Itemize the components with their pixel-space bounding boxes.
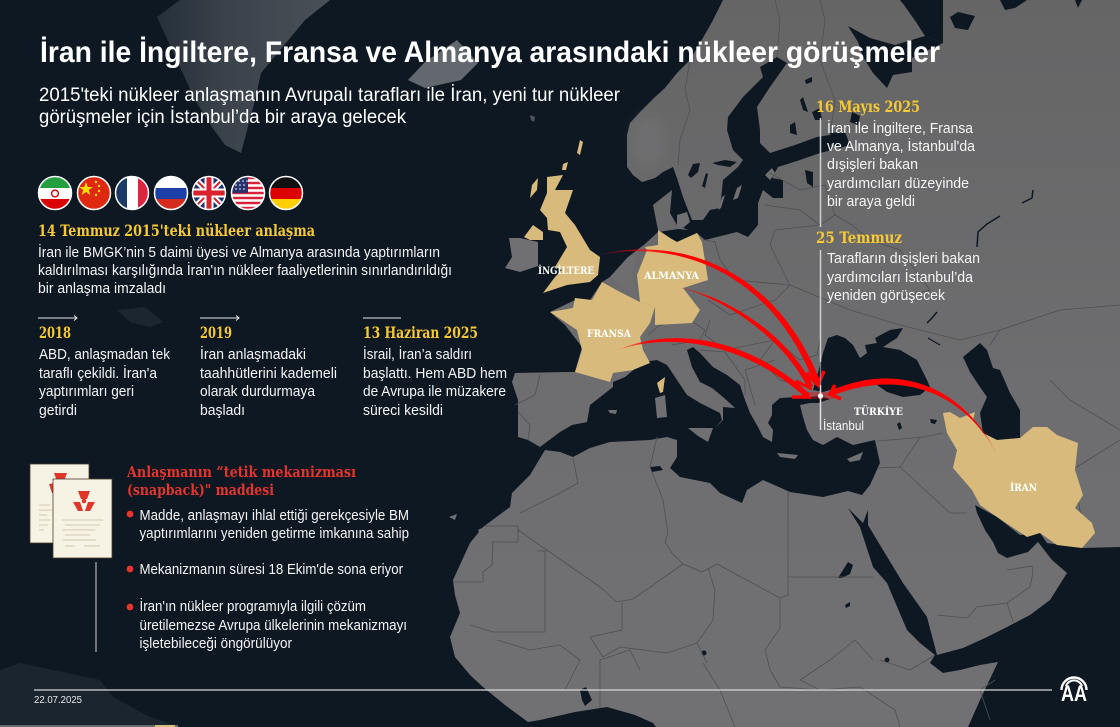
map: highlighted Germany	[637, 230, 708, 325]
icon: flag of United States	[232, 177, 264, 209]
map: Mediterranean and Baltic islands	[449, 168, 863, 534]
vertical line: to Istanbul	[820, 362, 822, 385]
icon: flag of Iran	[39, 177, 71, 209]
title: İran ile İngiltere, Fransa ve Almanya arasındaki nükleer görüşmeler	[40, 36, 940, 69]
text: 25 Temmuz body: Tarafların dışişleri bakan	[827, 251, 980, 267]
arrow: 2018	[38, 316, 77, 320]
map: Caspian Sea	[963, 343, 1020, 440]
text: 2018 body: yaptırımları geri	[39, 384, 134, 400]
map: highlighted France	[550, 282, 655, 382]
icon: flag of France	[116, 177, 148, 209]
footer	[34, 677, 1087, 706]
text: deal description: kaldırılması karşılığında İran'ın nükleer faaliyetlerinin sınırlandırıldığı	[38, 261, 452, 279]
heading: snapback	[126, 463, 356, 499]
heading: 16 Mayıs 2025: 16 Mayıs 2025	[816, 97, 920, 116]
footer line	[34, 689, 1052, 691]
text: deal description	[38, 243, 452, 297]
heading: 14 Temmuz 2015: 14 Temmuz 2015'teki nükleer anlaşma	[38, 221, 315, 240]
bullet point 3: üretilemezse Avrupa ülkelerinin mekanizmayı	[140, 618, 407, 634]
timeline: 2018	[38, 316, 171, 419]
text: 2025 body: İsrail, İran’a saldırı	[363, 345, 472, 363]
heading: 2018: 2018	[39, 323, 71, 342]
vertical line: 25 Temmuz	[820, 250, 822, 362]
text: 16 Mayıs body: İran ile İngiltere, Fransa	[827, 119, 973, 137]
icon: flag of United Kingdom	[193, 177, 225, 209]
label: Almanya: ALMANYA	[643, 270, 700, 282]
marker: Istanbul zone	[808, 392, 834, 399]
text: 25 Temmuz body: yardımcıları İstanbul’da	[827, 268, 973, 286]
text: 2018 body: getirdi	[39, 403, 77, 419]
text: 2025 body: başlattı. Hem ABD hem	[363, 366, 507, 382]
icon: nuclear documents	[30, 464, 112, 652]
timeline: right column	[816, 97, 980, 430]
text: 2025 body	[363, 345, 507, 419]
text: 2019 body: başladı	[200, 403, 245, 419]
text: 16 Mayıs body: yardımcıları düzeyinde	[827, 176, 969, 192]
bullet point 1: Madde, anlaşmayı ihlal ettiği gerekçesiyle BM	[140, 508, 409, 524]
bullet point 3: işletebileceği öngörülüyor	[140, 636, 292, 652]
document back	[30, 464, 89, 543]
vertical line: Istanbul stub	[820, 385, 822, 430]
arrow: from France	[618, 338, 810, 398]
text: 16 Mayıs body: bir araya geldi	[827, 194, 915, 210]
bullet point 3	[127, 597, 407, 652]
text: 16 Mayıs body: ve Almanya, İstanbul'da	[827, 137, 975, 155]
map: White Sea and Arctic bays	[848, 0, 1027, 88]
text: 2019 body: İran anlaşmadaki	[200, 345, 306, 363]
connector line	[95, 562, 97, 652]
text: 2025 body: de Avrupa ile müzakere	[363, 384, 506, 400]
bullet point 2: Mekanizmanın süresi 18 Ekim'de sona eriyor	[140, 562, 403, 578]
text: 25 Temmuz body	[827, 251, 980, 304]
heading: snapback: (snapback)" maddesi	[127, 481, 274, 499]
text: 16 Mayıs body	[827, 119, 975, 210]
subtitle	[39, 85, 621, 128]
bullet point 1: yaptırımlarını yeniden getirme imkanına sahip	[140, 526, 409, 542]
text: 2019 body: olarak durdurmaya	[200, 384, 315, 400]
subtitle: 2015'teki nükleer anlaşmanın Avrupalı tarafları ile İran, yeni tur nükleer	[39, 85, 621, 106]
text: deal description: bir anlaşma imzaladı	[38, 281, 166, 297]
icon: flag of China	[78, 177, 110, 209]
map: border lines	[453, 0, 1120, 727]
map: lakes and rivers	[580, 0, 1082, 706]
icon: flag of Germany	[270, 177, 302, 209]
text: 2018 body	[39, 347, 171, 419]
map: Europe, Asia and Africa land	[450, 0, 1120, 727]
map: relief highlight on Scandinavia	[632, 114, 664, 166]
icon: flag of Russia	[155, 177, 187, 209]
bullet point 3: İran'ın nükleer programıyla ilgili çözüm	[140, 597, 366, 615]
arrow: from United Kingdom	[595, 249, 824, 385]
map: Black Sea	[813, 328, 930, 397]
map labels	[538, 263, 1037, 494]
label: İran: İRAN	[1010, 480, 1037, 494]
arrow: 2019	[200, 316, 239, 320]
text: 2025 body: süreci kesildi	[363, 403, 443, 419]
bullet point 1	[127, 508, 409, 542]
flags row	[38, 176, 303, 210]
timeline: 2019	[200, 316, 337, 419]
map: faint landmasses at far left	[0, 0, 583, 727]
divider: 2025	[363, 317, 401, 319]
heading: 25 Temmuz: 25 Temmuz	[816, 228, 902, 247]
heading: snapback: Anlaşmanın “tetik mekanizması	[126, 463, 356, 481]
text: 25 Temmuz body: yeniden görüşecek	[827, 288, 946, 304]
text: 2018 body: taraflı çekildi. İran'a	[39, 364, 157, 382]
flag outlines	[38, 176, 302, 210]
marker: Istanbul dot	[818, 393, 823, 399]
arrow: from Iran	[830, 378, 998, 456]
arrow: from Germany	[677, 287, 813, 388]
logo: AA: AA	[1061, 681, 1087, 706]
text: 2019 body	[200, 345, 337, 419]
map: highlighted Iran	[943, 412, 1095, 548]
subtitle: görüşmeler için İstanbul’da bir araya gelecek	[39, 107, 406, 128]
date: 22.07.2025	[34, 695, 82, 706]
map: Benelux	[610, 256, 637, 300]
label: Fransa: FRANSA	[587, 328, 632, 340]
map: Ireland	[505, 238, 538, 272]
vertical line: 16 Mayıs	[820, 118, 822, 227]
map: Sea of Marmara	[808, 396, 830, 403]
timeline: 13 Haziran 2025	[363, 318, 507, 419]
text: 16 Mayıs body: dışişleri bakan	[827, 157, 918, 173]
heading: 13 Haziran 2025: 13 Haziran 2025	[363, 323, 478, 342]
list: snapback points	[127, 508, 409, 652]
arrows: flows to Istanbul	[595, 249, 998, 456]
text: 2019 body: taahhütlerini kademeli	[200, 366, 337, 382]
label: İstanbul: İstanbul	[823, 419, 864, 433]
label: Türkiye: TÜRKİYE	[854, 404, 903, 418]
text: 2018 body: ABD, anlaşmadan tek	[39, 347, 171, 363]
document front	[53, 479, 112, 558]
text: deal description: İran ile BMGK’nin 5 daimi üyesi ve Almanya arasında yaptırımların	[38, 243, 440, 261]
heading: 2019: 2019	[200, 323, 232, 342]
map: highlighted United Kingdom	[524, 175, 600, 293]
label: İngiltere: İNGİLTERE	[538, 263, 594, 277]
